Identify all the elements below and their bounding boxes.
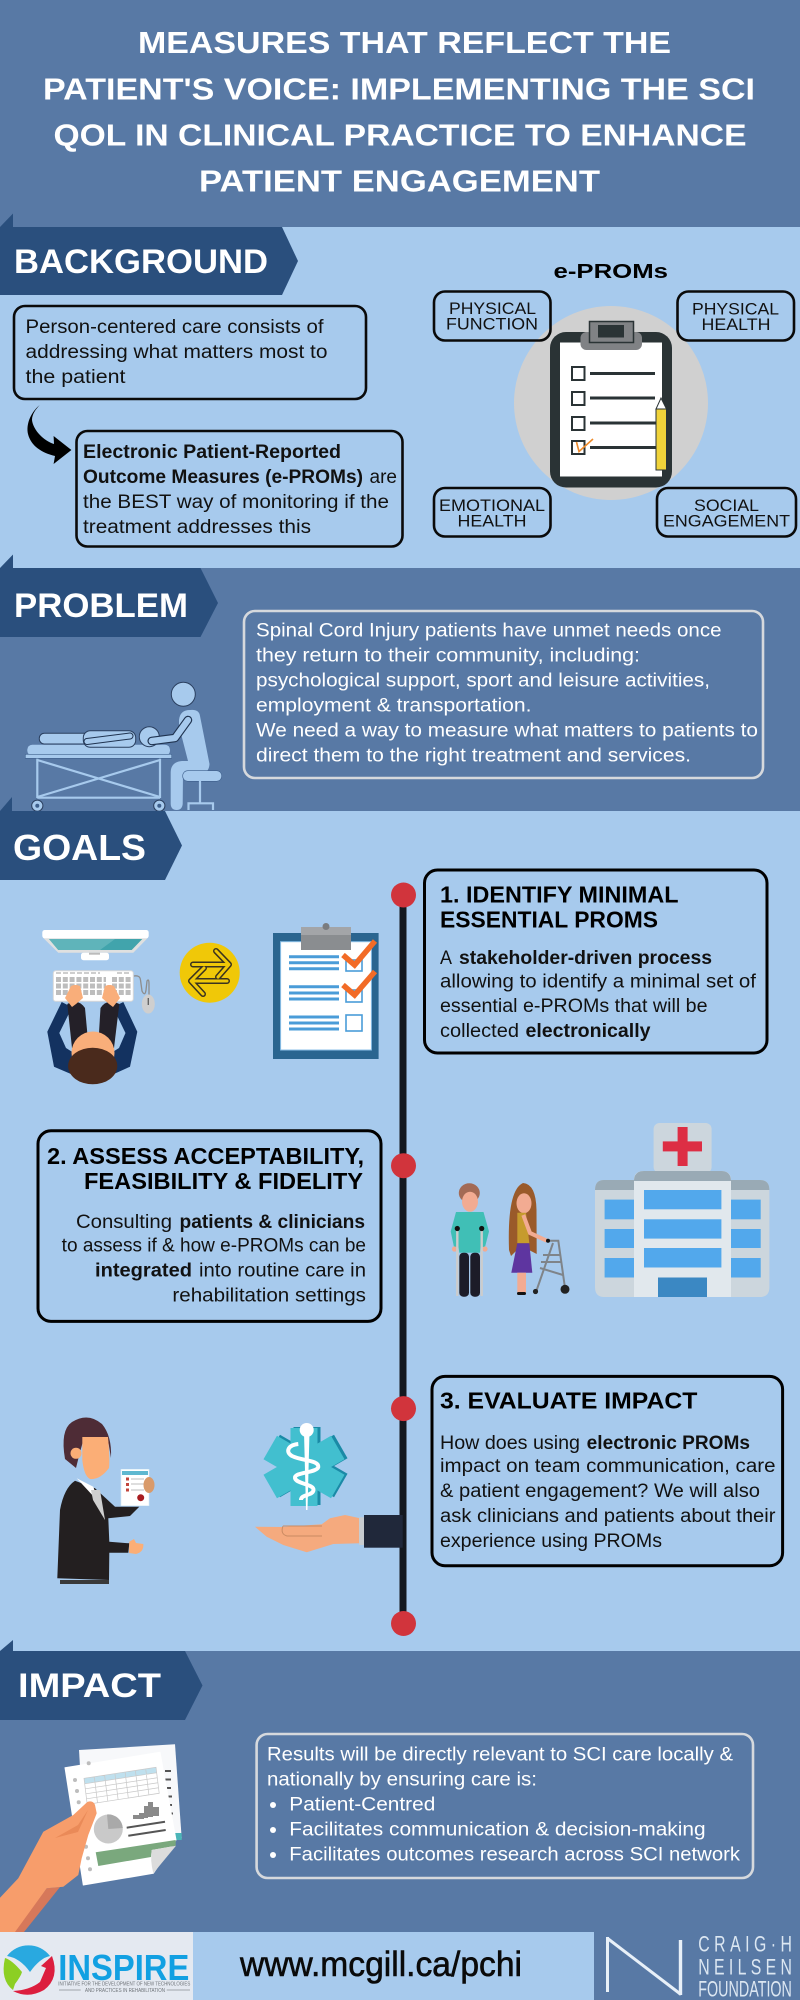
goal 1 box: A xyxy=(440,948,452,969)
title xyxy=(43,25,755,198)
goal 3 box xyxy=(432,1376,783,1566)
label: physical health: HEALTH xyxy=(702,315,770,334)
text box: e-PROMs definition: the BEST way of monitoring if the xyxy=(83,492,389,513)
section ribbon: impact: IMPACT xyxy=(18,1667,161,1705)
text box: impact results list: nationally by ensuring care is: xyxy=(267,1770,537,1791)
goal 1 box xyxy=(424,870,767,1053)
title: PATIENT'S VOICE: IMPLEMENTING THE SCI xyxy=(43,72,755,106)
goal 3 box: impact on team communication, care xyxy=(440,1456,776,1477)
text box: problem description: employment & transportation. xyxy=(256,696,532,717)
goal 1 box: collected xyxy=(440,1021,519,1042)
section ribbon: background: BACKGROUND xyxy=(14,243,268,281)
arrow: curved black xyxy=(27,405,71,464)
goal 3 box: ask clinicians and patients about their xyxy=(440,1506,776,1527)
text box: problem description: Spinal Cord Injury patients have unmet needs once xyxy=(256,621,722,642)
icon: clipboard with orange checks xyxy=(273,923,379,1059)
goal 2 box: Consulting xyxy=(76,1212,172,1233)
text box: e-PROMs definition: treatment addresses this xyxy=(83,517,311,538)
text box: problem description: direct them to the right treatment and services. xyxy=(256,746,691,767)
label: physical function xyxy=(434,292,550,340)
icon: clipboard checklist xyxy=(514,306,708,500)
label: social engagement: SOCIAL xyxy=(694,496,759,515)
goal 3 box: & patient engagement? We will also xyxy=(440,1481,760,1502)
goal 1 box: stakeholder-driven process xyxy=(459,948,712,969)
section ribbon: impact xyxy=(0,1640,202,1720)
goal 2 box: to assess if & how e-PROMs can be xyxy=(62,1236,366,1256)
text box: problem description xyxy=(244,611,763,778)
goal 1 box: ESSENTIAL PROMS xyxy=(440,906,658,932)
goal 2 box: rehabilitation settings xyxy=(172,1286,366,1306)
text box: impact results list xyxy=(257,1734,753,1878)
label: emotional health xyxy=(434,488,550,536)
goal 3 box: electronic PROMs xyxy=(587,1433,750,1454)
title: QOL IN CLINICAL PRACTICE TO ENHANCE xyxy=(54,118,746,152)
text box: person-centered care: the patient xyxy=(26,367,126,388)
illustration: doctor holding a form xyxy=(57,1417,154,1584)
text box: problem description: We need a way to measure what matters to patients to xyxy=(256,721,758,742)
goal 1 box: allowing to identify a minimal set of xyxy=(440,972,757,992)
section ribbon: problem: PROBLEM xyxy=(14,587,188,625)
label: emotional health: HEALTH xyxy=(458,512,526,530)
timeline with milestone dots xyxy=(391,882,416,1636)
footer logo: INSPIRE: INSPIRE xyxy=(58,1947,189,1988)
goal 3 box: How does using xyxy=(440,1433,580,1454)
label: social engagement xyxy=(657,488,796,536)
section ribbon: problem xyxy=(0,554,218,637)
footer logo: INSPIRE xyxy=(0,1932,193,2000)
goal 2 box xyxy=(38,1131,381,1321)
text box: impact results list: Facilitates communication & decision-making xyxy=(289,1820,706,1841)
footer logo: Craig H. Neilsen Foundation xyxy=(594,1932,800,2000)
title: PATIENT ENGAGEMENT xyxy=(199,164,600,198)
section ribbon: background xyxy=(0,214,298,295)
text box: problem description: psychological support, sport and leisure activities, xyxy=(256,671,710,692)
text box: e-PROMs definition: Electronic Patient-Reported xyxy=(83,442,341,463)
goal 2 box: integrated xyxy=(95,1260,192,1282)
label: physical function: PHYSICAL xyxy=(449,299,536,318)
section ribbon: goals: GOALS xyxy=(13,827,146,868)
text box: impact results list: Facilitates outcomes research across SCI network xyxy=(289,1845,741,1866)
goal 1 box: 1. IDENTIFY MINIMAL xyxy=(440,881,678,907)
illustration: patients with crutches and walker xyxy=(451,1183,570,1297)
goal 3 box: 3. EVALUATE IMPACT xyxy=(440,1388,697,1414)
goal 2 box: FEASIBILITY & FIDELITY xyxy=(84,1168,363,1194)
text box: person-centered care: addressing what matters most to xyxy=(26,342,328,363)
label: physical function: FUNCTION xyxy=(446,314,538,334)
footer logo: INSPIRE: INITIATIVE FOR THE DEVELOPMENT OF NEW TECHNOLOGIES xyxy=(58,1982,191,1988)
text box: person-centered care xyxy=(14,306,366,399)
icon: yellow exchange arrows xyxy=(180,943,240,1003)
section ribbon: goals xyxy=(0,811,182,880)
goal 3 box: experience using PROMs xyxy=(440,1531,662,1552)
goal 2 box: into routine care in xyxy=(199,1260,366,1282)
text box: impact results list: Patient-Centred xyxy=(289,1795,435,1816)
text box: problem description: they return to their community, including: xyxy=(256,646,640,667)
illustration: hospital building xyxy=(595,1123,769,1297)
goal 2 box: 2. ASSESS ACCEPTABILITY, xyxy=(47,1143,364,1169)
label: physical health: PHYSICAL xyxy=(692,300,779,318)
footer logo: Craig H. Neilsen Foundation: NEILSEN xyxy=(698,1956,792,1980)
illustration: therapist treating patient on table xyxy=(0,682,222,811)
text box: e-PROMs definition: Outcome Measures (e-PROMs) xyxy=(83,467,363,488)
label: social engagement: ENGAGEMENT xyxy=(663,512,790,530)
text box: e-PROMs definition: are xyxy=(370,467,397,488)
footer logo: Craig H. Neilsen Foundation: CRAIG·H xyxy=(698,1933,792,1957)
goal 2 box: patients & clinicians xyxy=(180,1212,365,1233)
icon: open hand with cuff xyxy=(255,1515,403,1552)
label: emotional health: EMOTIONAL xyxy=(439,496,545,515)
illustration: person at computer, top view xyxy=(42,930,155,1084)
icon: star of life xyxy=(263,1423,348,1510)
website link: www.mcgill.ca/pchi xyxy=(239,1945,522,1984)
illustration: hand holding report pages xyxy=(0,1744,182,1932)
goal 1 box: essential e-PROMs that will be xyxy=(440,996,708,1017)
text box: person-centered care: Person-centered care consists of xyxy=(26,317,324,338)
text box: impact results list: Results will be directly relevant to SCI care locally & xyxy=(267,1745,733,1766)
heading: e-PROMs: e-PROMs xyxy=(554,261,668,283)
footer logo: INSPIRE: AND PRACTICES IN REHABILITATION xyxy=(85,1988,165,1994)
label: physical health xyxy=(678,292,794,340)
goal 1 box: electronically xyxy=(526,1021,651,1042)
text box: e-PROMs definition xyxy=(76,431,402,546)
title: MEASURES THAT REFLECT THE xyxy=(138,25,671,60)
